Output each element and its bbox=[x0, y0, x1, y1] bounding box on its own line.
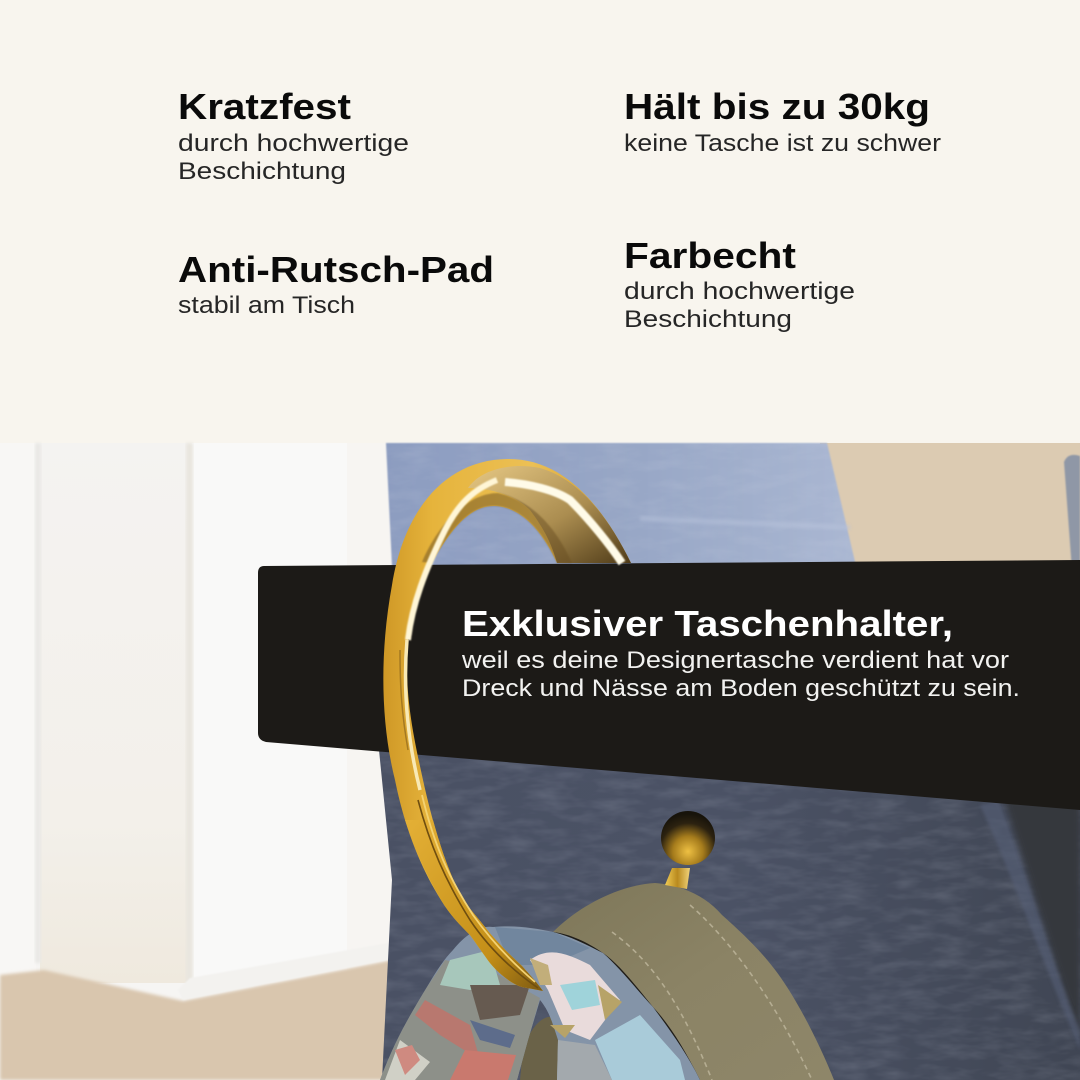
text: callout description: weil es deine Designertasche verdient hat vor bbox=[461, 647, 1009, 674]
chair back upper (light blue) bbox=[386, 443, 856, 566]
heading: Exklusiver Taschenhalter: Exklusiver Taschenhalter, bbox=[462, 603, 953, 644]
ring arch shading bbox=[468, 466, 631, 563]
text: callout description: Dreck und Nässe am Boden geschützt zu sein. bbox=[462, 675, 1020, 702]
callout: Exklusiver Taschenhalter bbox=[461, 603, 1020, 702]
gold ball clasp bbox=[661, 811, 715, 889]
text: Anti-Rutsch-Pad description: stabil am Tisch bbox=[178, 292, 355, 319]
heading: Anti-Rutsch-Pad: Anti-Rutsch-Pad bbox=[178, 249, 494, 290]
text: Farbecht description: durch hochwertige bbox=[624, 278, 855, 305]
heading: Hält bis zu 30kg: Hält bis zu 30kg bbox=[624, 86, 930, 127]
bag strap bbox=[520, 883, 834, 1080]
photo: bag holder scene bbox=[0, 443, 1080, 1080]
text: Hält bis zu 30kg description: keine Tasche ist zu schwer bbox=[624, 130, 941, 157]
black table bar bbox=[258, 560, 1080, 810]
text: Kratzfest description: Beschichtung bbox=[178, 158, 346, 185]
feature: Farbecht bbox=[624, 235, 855, 333]
gold ring holder bbox=[383, 459, 631, 991]
strap stitching bbox=[612, 905, 812, 1080]
feature: Anti-Rutsch-Pad bbox=[178, 249, 494, 319]
chair back lower (dark blue) bbox=[378, 740, 1080, 1080]
floor bbox=[0, 960, 392, 1080]
skirting board bbox=[178, 943, 388, 1000]
feature: Hält bis zu 30kg bbox=[624, 86, 941, 157]
feature: Kratzfest bbox=[178, 86, 409, 185]
text: Kratzfest description: durch hochwertige bbox=[178, 130, 409, 157]
photo background: blurred white wall bbox=[0, 443, 1080, 1080]
ring lower shading bbox=[405, 820, 543, 991]
distant chair edge bbox=[1064, 455, 1080, 570]
text: Farbecht description: Beschichtung bbox=[624, 306, 792, 333]
beige wall right bbox=[820, 443, 1080, 568]
heading: Farbecht: Farbecht bbox=[624, 235, 796, 276]
ring highlights bbox=[408, 480, 497, 640]
heading: Kratzfest: Kratzfest bbox=[178, 86, 351, 127]
patterned silk scarf bbox=[380, 926, 700, 1080]
cream background panel bbox=[0, 0, 1080, 443]
